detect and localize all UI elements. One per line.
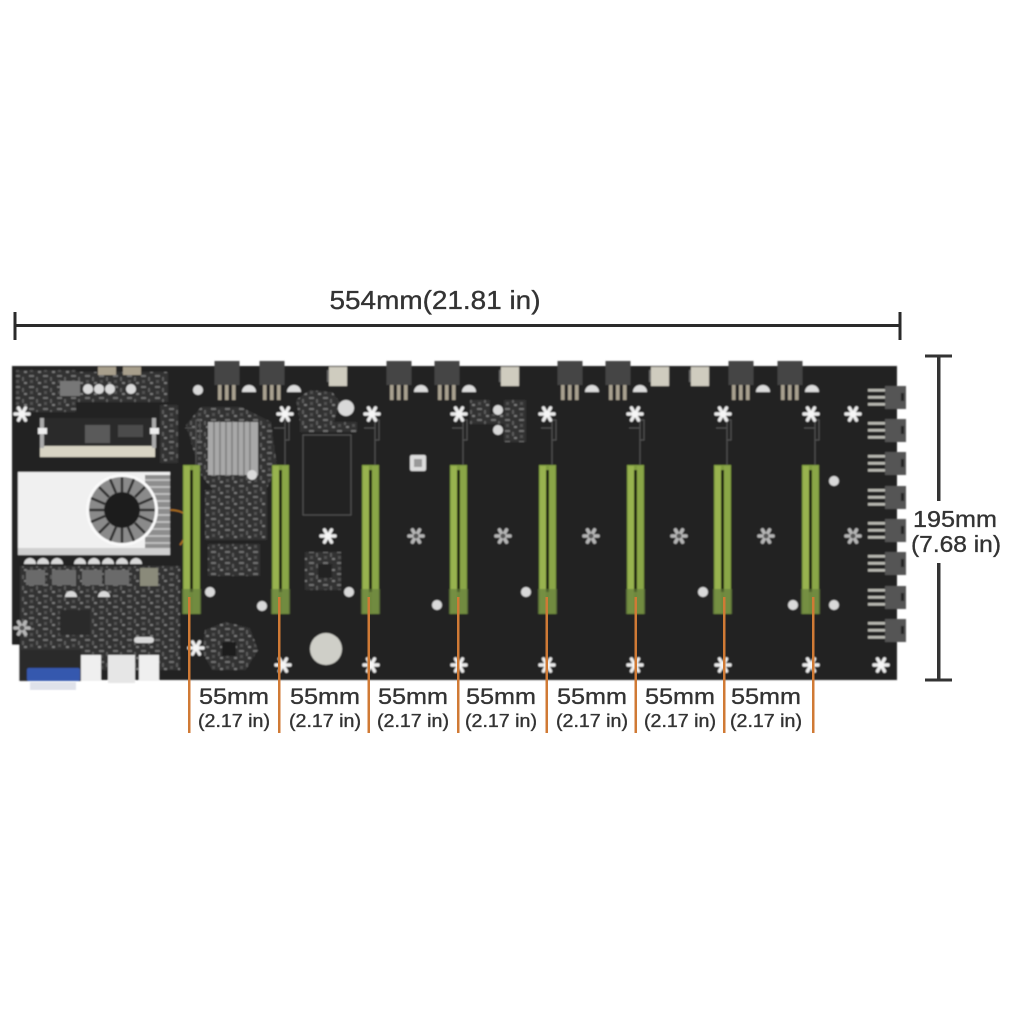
orange fan wire (170, 510, 188, 545)
top power connectors (214, 361, 819, 400)
height dimension label (911, 506, 1001, 557)
slot spacing labels: (2.17 in) (730, 711, 802, 731)
slot spacing labels: 55mm (466, 684, 536, 709)
dark regulator blocks (26, 367, 332, 656)
mPCIe outline (303, 435, 351, 515)
slot spacing labels: (2.17 in) (465, 711, 537, 731)
slot spacing labels: 55mm (199, 684, 269, 709)
small silver connectors (327, 367, 709, 386)
right side connectors (868, 386, 906, 642)
silver capacitors and battery (310, 400, 839, 665)
height dimension arrow (925, 354, 952, 682)
slot spacing labels: (2.17 in) (644, 711, 716, 731)
PCIe slots (182, 420, 820, 614)
VGA connector lower edge (30, 682, 76, 690)
slot spacing labels: (2.17 in) (198, 711, 270, 731)
slot spacing labels: (2.17 in) (377, 711, 449, 731)
capacitors row (24, 384, 267, 643)
slot spacing labels: 55mm (557, 684, 627, 709)
mounting holes (15, 408, 888, 671)
RAM slot (38, 418, 159, 457)
slot spacing labels: 55mm (378, 684, 448, 709)
icon: CPU cooler with fan (18, 472, 170, 555)
slot spacing labels (198, 684, 802, 731)
rear IO ports (8, 645, 159, 683)
slot spacing labels: 55mm (290, 684, 360, 709)
slot spacing labels: 55mm (645, 684, 715, 709)
width dimension arrow (14, 312, 902, 340)
slot spacing labels: 55mm (731, 684, 801, 709)
circuitry texture (16, 370, 526, 670)
orange spacing lines (188, 597, 814, 733)
slot spacing labels: (2.17 in) (556, 711, 628, 731)
board base (12, 366, 897, 680)
width dimension label: 554mm(21.81 in) (330, 285, 540, 315)
motherboard (8, 361, 906, 683)
height dimension label: 195mm (913, 506, 997, 532)
slot spacing labels: (2.17 in) (289, 711, 361, 731)
icon: CPU heatsink (208, 422, 258, 475)
height dimension label: (7.68 in) (911, 531, 1001, 557)
